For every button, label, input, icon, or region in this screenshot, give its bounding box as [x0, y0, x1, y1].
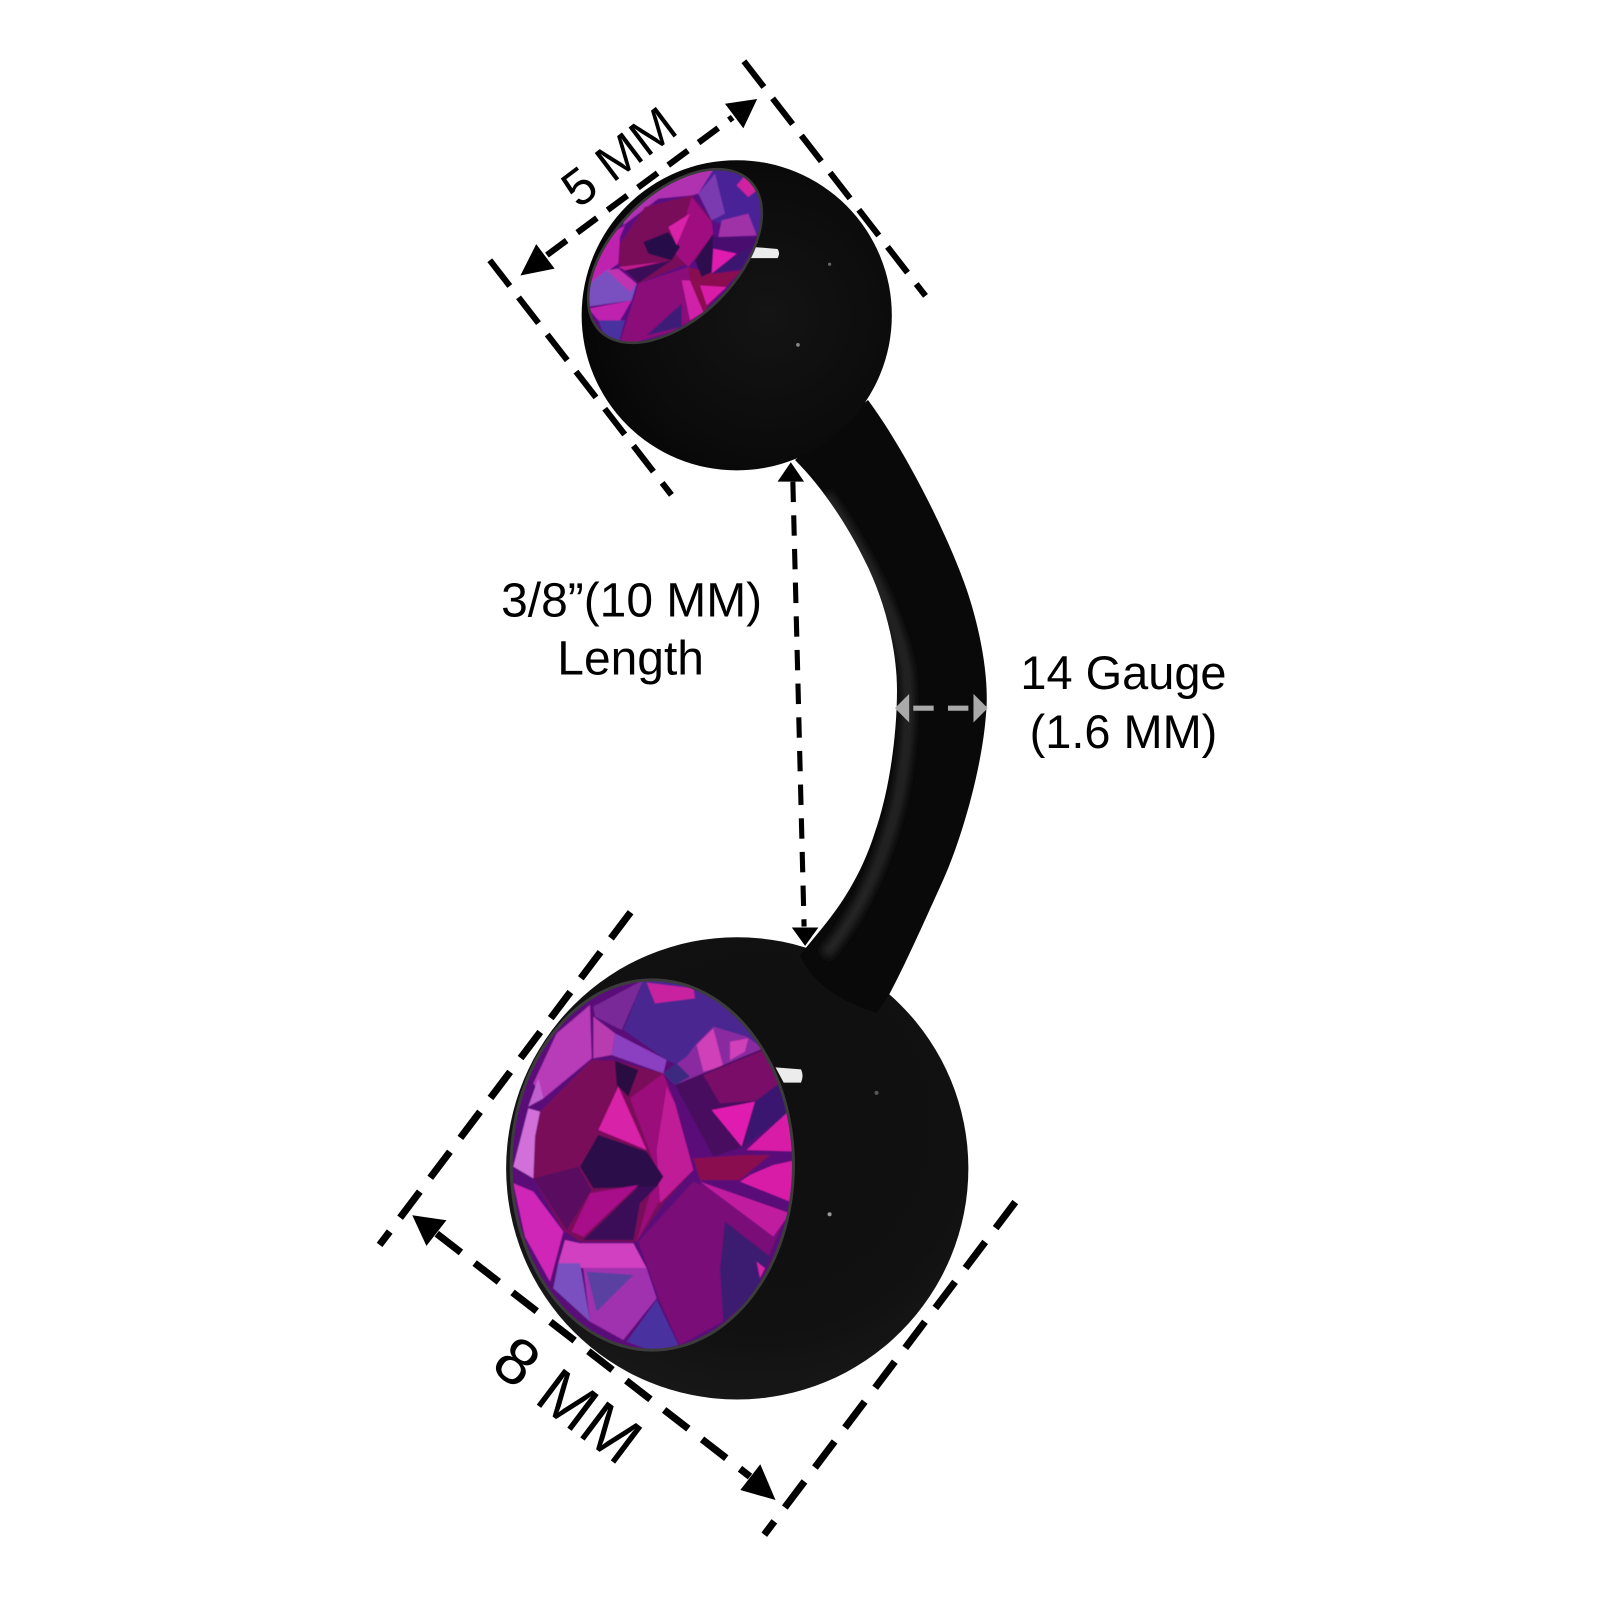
dimension: 8 MM: [380, 912, 1015, 1535]
large gem on bottom ball: [510, 978, 795, 1352]
label: 8 MM: 8 MM: [481, 1321, 655, 1478]
label: gauge: 14 Gauge: [1020, 647, 1227, 699]
curved barbell shaft: [795, 400, 987, 1013]
top ball: [582, 160, 892, 470]
dimension: gauge: (1.6 MM): [1030, 706, 1217, 758]
bottom ball highlight: [776, 1067, 803, 1083]
dimension: 5 MM: [490, 61, 926, 495]
dimension: gauge: [895, 647, 1227, 758]
bottom ball: [506, 937, 968, 1399]
small gem on top ball: [586, 168, 763, 344]
infographic: belly bar size diagram: [376, 59, 1224, 1537]
top ball highlight: [750, 247, 779, 258]
label: 5 MM: 5 MM: [551, 96, 687, 218]
label: length: 3/8”(10 MM): [501, 574, 762, 627]
dimension: length: Length: [557, 632, 704, 685]
dimension: length: [501, 462, 818, 946]
